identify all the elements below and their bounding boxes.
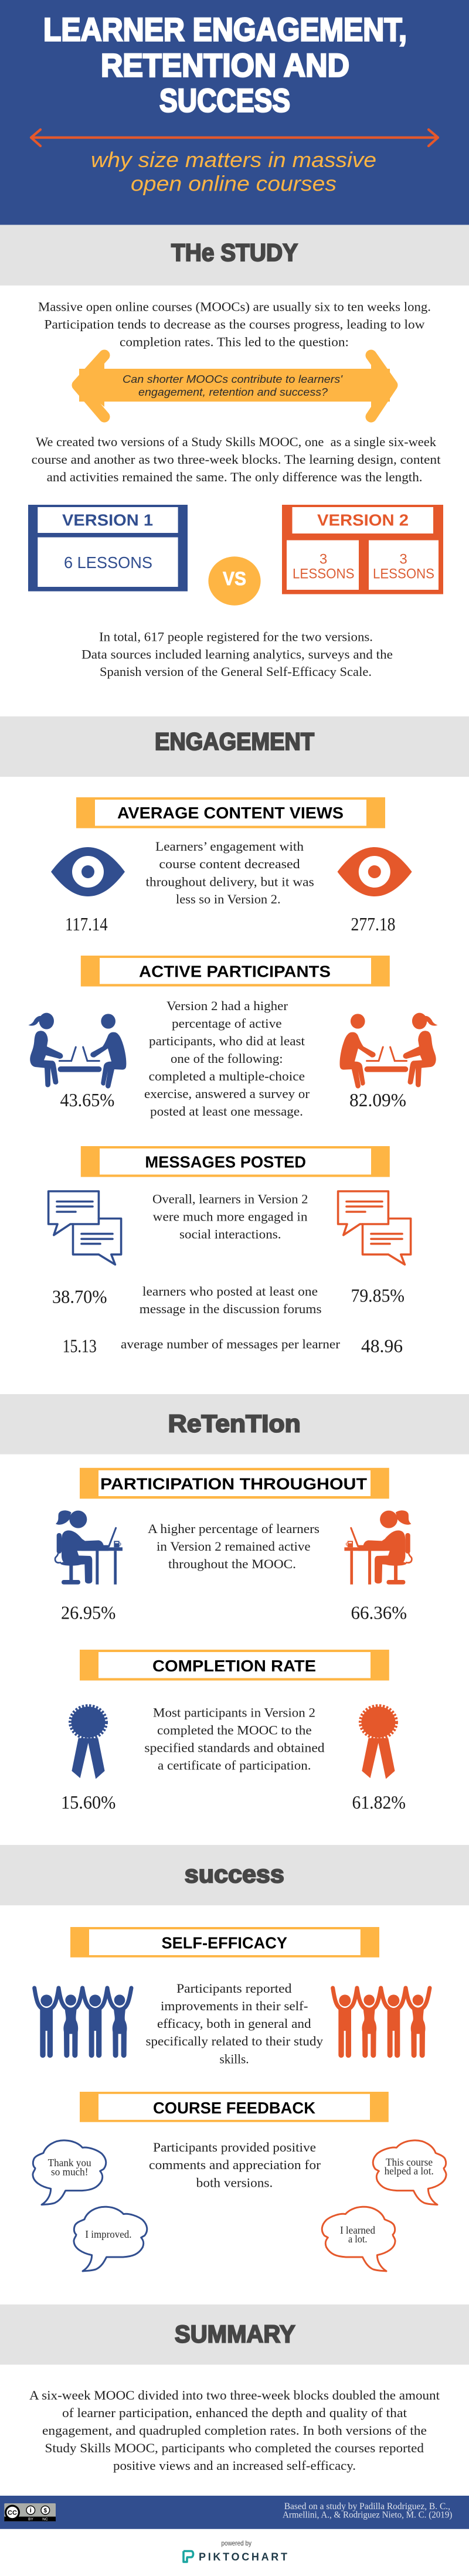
icon: creative commons badge: NC	[42, 2517, 48, 2521]
panel: version 1: VERSION 1	[62, 511, 153, 529]
wordmark: PIKTOCHART	[199, 2551, 287, 2563]
text block: active participants: one of the following:	[171, 1051, 283, 1066]
title	[43, 11, 407, 119]
panel: version 2: LESSONS	[293, 566, 355, 582]
icon: creative commons badge: i	[30, 2507, 32, 2514]
icon: blue chat bubbles	[49, 1191, 121, 1265]
heading banner: active participants	[81, 956, 390, 987]
text block: social interactions	[152, 1191, 308, 1242]
speech bubble: this course helped: This course	[386, 2156, 433, 2168]
text block: active participants: participants, who did at least	[149, 1034, 305, 1048]
subtitle: open online courses	[131, 171, 337, 195]
panel: participation throughout	[55, 1468, 412, 1623]
icon: creative commons badge: CC	[8, 2509, 17, 2516]
footer band	[0, 2496, 469, 2529]
statistic: version 2 participation: 66.36%	[351, 1602, 407, 1623]
text block: content views: less so in Version 2.	[176, 892, 281, 906]
statistic: version 1 completion: 15.60%	[61, 1792, 115, 1813]
section heading: the study: THe STUDY	[171, 239, 298, 266]
text block: registration and data sources	[81, 630, 393, 679]
text block: social interactions: were much more engaged in	[153, 1209, 307, 1224]
icon: creative commons badge: BY	[28, 2517, 33, 2521]
panel: version 1	[28, 505, 188, 592]
text block: summary: positive views and an increased self-efficacy.	[113, 2458, 356, 2473]
statistic: version 2 posters: 79.85%	[351, 1285, 405, 1306]
panel: version 2	[282, 505, 443, 594]
icon: blue eye	[51, 847, 125, 896]
text block: active participants: percentage of active	[172, 1016, 282, 1031]
text block: registration and data sources: In total, 617 people registered for the two versions.	[99, 630, 373, 644]
panel: average content views	[51, 797, 412, 934]
panel: version 2: LESSONS	[373, 566, 434, 582]
text block: posters label: learners who posted at least one	[142, 1284, 318, 1299]
heading banner: self-efficacy: SELF-EFFICACY	[162, 1933, 287, 1952]
icon: blue people at laptops	[28, 1013, 126, 1089]
text block: summary: of learner participation, enhanced the depth and quality of that	[62, 2405, 407, 2420]
speech bubble: this course helped: helped a lot.	[385, 2165, 434, 2177]
icon: vs badge	[208, 556, 261, 606]
text block: participation: A higher percentage of learners	[148, 1521, 320, 1536]
panel: self-efficacy	[35, 1927, 430, 2066]
text block: participation: in Version 2 remained active	[157, 1539, 311, 1554]
speech bubble: this course helped	[373, 2140, 446, 2205]
icon: piktochart logo	[183, 2551, 193, 2562]
icon: creative commons badge	[4, 2503, 56, 2521]
text block: active participants: exercise, answered a survey or	[144, 1086, 310, 1101]
heading banner: participation throughout	[80, 1468, 389, 1498]
callout: research question arrow: Can shorter MOOCs contribute to learners'	[123, 373, 343, 385]
section heading: retention	[0, 1394, 469, 1454]
statistic: version 2 active: 82.09%	[349, 1089, 406, 1110]
text block: self-efficacy: skills.	[219, 2051, 249, 2066]
text block: feedback	[149, 2140, 321, 2190]
panel: version 1: 6 LESSONS	[64, 553, 152, 572]
text block: content views: throughout delivery, but it was	[145, 874, 314, 889]
heading banner: average content views: AVERAGE CONTENT VIEWS	[117, 804, 344, 822]
heading banner: completion rate	[80, 1650, 389, 1680]
subtitle	[91, 148, 376, 195]
text block: completion	[144, 1705, 325, 1773]
text block: completion: a certificate of participation.	[158, 1758, 311, 1773]
text block: summary: Study Skills MOOC, participants who completed the courses reported	[45, 2441, 424, 2455]
text block: self-efficacy	[145, 1981, 324, 2066]
text block: active participants	[144, 998, 310, 1119]
text block: active participants: posted at least one message.	[150, 1104, 303, 1119]
panel: version 2: 3	[320, 552, 327, 567]
heading banner: messages posted	[81, 1146, 390, 1177]
text block: summary: A six-week MOOC divided into two three-week blocks doubled the amount	[29, 2388, 440, 2402]
text block: self-efficacy: specifically related to their study	[145, 2034, 324, 2048]
speech bubble: i learned: I learned	[340, 2224, 375, 2236]
icon: blue learner at desk	[55, 1510, 123, 1585]
text block: study introduction	[38, 300, 431, 349]
statistic: version 1 views: 117.14	[65, 913, 108, 934]
speech bubble: thank you	[33, 2140, 106, 2205]
section heading: engagement: ENGAGEMENT	[155, 728, 314, 755]
heading banner: messages posted: MESSAGES POSTED	[145, 1153, 306, 1171]
statistic: version 1 participation: 26.95%	[61, 1602, 115, 1623]
piktochart credit	[183, 2539, 287, 2563]
icon: orange people at laptops	[339, 1013, 438, 1089]
speech bubble: i learned	[322, 2207, 395, 2271]
text block: citation	[283, 2502, 452, 2520]
text block: feedback: both versions.	[196, 2175, 273, 2190]
icon: orange cheering group	[333, 1988, 430, 2058]
subtitle: why size matters in massive	[91, 148, 376, 172]
text block: citation: Armellini, A., & Rodriguez Nieto, M. C. (2019)	[283, 2510, 452, 2520]
text block: participation	[148, 1521, 320, 1571]
section heading: summary	[0, 2305, 469, 2365]
statistic: version 1 messages: 15.13	[63, 1335, 97, 1357]
text block: participation: throughout the MOOC.	[168, 1557, 296, 1571]
heading banner: course feedback: COURSE FEEDBACK	[153, 2099, 315, 2117]
text block: social interactions: Overall, learners in Version 2	[152, 1191, 308, 1206]
text block: feedback: Participants provided positive	[153, 2140, 316, 2154]
piktochart credit: powered by	[222, 2539, 252, 2547]
text block: posters label: message in the discussion forums	[140, 1301, 322, 1316]
text block: two versions	[32, 434, 441, 484]
icon: orange ribbon	[361, 1706, 396, 1779]
speech bubble: i learned: a lot.	[348, 2233, 367, 2245]
section heading: the study	[0, 225, 469, 286]
heading banner: active participants: ACTIVE PARTICIPANTS	[139, 962, 331, 980]
text block: registration and data sources: Spanish version of the General Self-Efficacy Scale.	[100, 664, 372, 679]
text block: active participants: Version 2 had a higher	[166, 998, 288, 1013]
text block: study introduction: Participation tends to decrease as the courses progress, leading to low	[45, 317, 425, 331]
heading banner: course feedback	[80, 2092, 389, 2122]
panel: active participants	[28, 956, 438, 1119]
section heading: summary: SUMMARY	[175, 2320, 295, 2348]
text block: messages label: average number of messages per learner	[121, 1337, 341, 1351]
statistic: version 1 active: 43.65%	[60, 1089, 114, 1110]
title: SUCCESS	[159, 82, 290, 119]
section heading: retention: ReTenTIon	[168, 1409, 301, 1437]
text block: completion: completed the MOOC to the	[157, 1722, 312, 1738]
text block: social interactions: social interactions.	[179, 1226, 281, 1242]
speech bubble: i improved: I improved.	[85, 2228, 131, 2240]
speech bubble: thank you: so much!	[51, 2166, 88, 2177]
speech bubble: i improved	[74, 2207, 147, 2271]
icon: orange chat bubbles	[338, 1191, 411, 1265]
text block: self-efficacy: improvements in their self-	[161, 1999, 308, 2013]
icon: vs badge: VS	[223, 568, 246, 589]
statistic: version 2 messages: 48.96	[361, 1335, 403, 1357]
text block: two versions: We created two versions of a Study Skills MOOC, one as a single six-week	[36, 434, 437, 449]
text block: content views: course content decreased	[159, 857, 300, 871]
icon: blue ribbon	[70, 1706, 106, 1779]
text block: completion: specified standards and obtained	[144, 1740, 325, 1755]
panel: messages posted	[49, 1146, 411, 1357]
statistic: version 2 views: 277.18	[351, 913, 395, 934]
header panel	[0, 0, 469, 225]
text block: active participants: completed a multiple-choice	[149, 1069, 305, 1083]
title: RETENTION AND	[101, 47, 349, 84]
text block: self-efficacy: Participants reported	[176, 1981, 292, 1996]
text block: two versions: course and another as two three-week blocks. The learning design, content	[32, 452, 441, 467]
statistic: version 1 posters: 38.70%	[52, 1286, 107, 1307]
text block: posters label	[140, 1284, 322, 1316]
statistic: version 2 completion: 61.82%	[352, 1792, 406, 1813]
panel: version 2: VERSION 2	[317, 511, 409, 529]
text block: registration and data sources: Data sources included learning analytics, surveys and the	[81, 647, 393, 661]
text block: citation: Based on a study by Padilla Rodriguez, B. C.,	[284, 2502, 450, 2512]
icon: orange eye	[338, 847, 412, 896]
section heading: success: success	[185, 1860, 284, 1888]
text block: summary: engagement, and quadrupled completion rates. In both versions of the	[42, 2423, 427, 2438]
heading banner: completion rate: COMPLETION RATE	[152, 1657, 316, 1675]
text block: two versions: and activities remained the same. The only difference was the length.	[47, 470, 423, 484]
section heading: engagement	[0, 716, 469, 777]
text block: summary	[29, 2388, 440, 2473]
speech bubble: thank you: Thank you	[48, 2157, 91, 2169]
title: LEARNER ENGAGEMENT,	[43, 11, 407, 48]
callout: research question arrow: engagement, retention and success?	[138, 386, 328, 398]
section heading: success	[0, 1845, 469, 1905]
text block: content views: Learners’ engagement with	[155, 839, 304, 854]
callout: research question arrow	[77, 355, 392, 417]
heading banner: average content views	[76, 797, 385, 828]
heading banner: participation throughout: PARTICIPATION THROUGHOUT	[100, 1475, 367, 1493]
text block: study introduction: completion rates. This led to the question:	[120, 334, 349, 349]
heading banner: self-efficacy	[70, 1927, 379, 1958]
panel: completion rate	[61, 1650, 406, 1813]
icon: creative commons badge: $	[44, 2508, 47, 2514]
text block: self-efficacy: efficacy, both in general and	[157, 2016, 311, 2031]
text block: completion: Most participants in Version 2	[153, 1705, 315, 1720]
text block: study introduction: Massive open online courses (MOOCs) are usually six to ten weeks long.	[38, 300, 431, 314]
panel: version 2: 3	[399, 552, 407, 567]
arrow: double-headed divider	[31, 130, 438, 146]
panel: course feedback	[33, 2092, 446, 2271]
text block: feedback: comments and appreciation for	[149, 2157, 321, 2172]
text block: content views	[145, 839, 314, 906]
icon: orange learner at desk	[344, 1510, 412, 1585]
icon: blue cheering group	[35, 1988, 131, 2058]
